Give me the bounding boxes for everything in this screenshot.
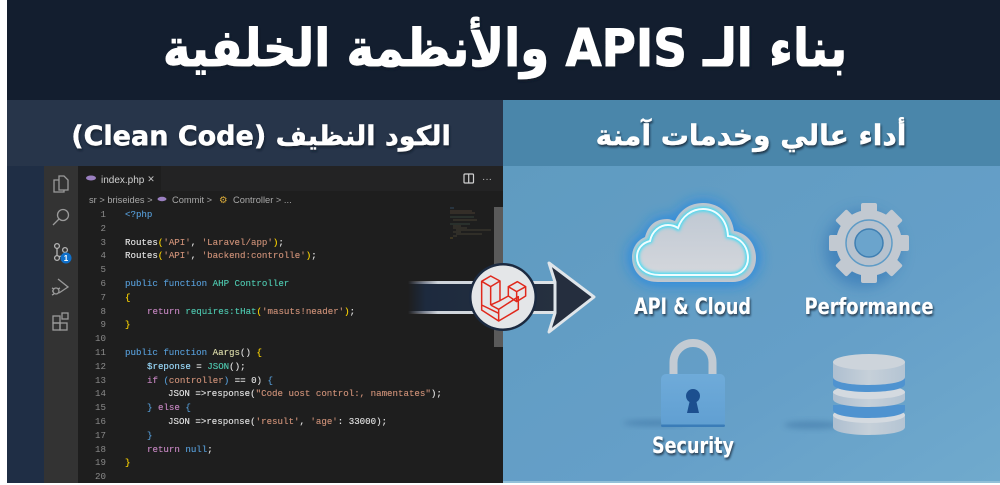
heading: performance: أداء عالي وخدمات آمنة (596, 117, 906, 152)
line numbers (95, 209, 107, 482)
line numbers: 2 (101, 223, 106, 234)
line numbers: 12 (95, 361, 106, 372)
line numbers: 16 (95, 416, 106, 427)
code listing: public function Aargs() { (125, 347, 262, 358)
code listing: Routes('API', 'Laravel/app'); (125, 237, 284, 248)
code listing (125, 209, 442, 468)
code listing: return null; (147, 444, 213, 455)
code listing: if (controller) == 0) { (147, 375, 273, 386)
tab: index.php: index.php (101, 175, 145, 186)
tab bar (78, 166, 503, 191)
label: Security: Security (652, 434, 734, 459)
line numbers: 14 (95, 388, 107, 399)
code listing: { (125, 292, 130, 303)
icon: laravel logo (482, 276, 526, 321)
line numbers: 7 (101, 292, 106, 303)
icon: files (54, 176, 68, 192)
code listing: Routes('API', 'backend:controlle'); (125, 250, 317, 261)
code listing: return requires:tHat('masuts!neader'); (147, 306, 355, 317)
tab: index.php (78, 166, 161, 191)
breadcrumbs: sr > briseides > (89, 195, 153, 205)
icon: laravel badge (469, 263, 537, 331)
title: بناء الـ APIS والأنظمة الخلفية (163, 16, 847, 80)
breadcrumbs: ⚙ (219, 195, 227, 205)
icon: source control (55, 244, 67, 260)
panel: performance header (503, 100, 1000, 166)
scrollbar (494, 207, 503, 347)
line numbers: 10 (95, 333, 106, 344)
line numbers: 4 (101, 250, 107, 261)
code listing: } (125, 319, 130, 330)
code listing: <?php (125, 209, 152, 220)
code listing: public function AHP Controller (125, 278, 289, 289)
line numbers: 20 (95, 471, 106, 482)
title band (7, 0, 1000, 100)
icon: database (784, 354, 905, 435)
icon: extensions (53, 313, 68, 330)
icon: cloud (629, 201, 759, 285)
breadcrumbs: Commit > (172, 195, 212, 205)
line numbers: 8 (101, 306, 106, 317)
code listing: JSON =>response('result', 'age': 33000); (168, 416, 387, 427)
breadcrumbs: Controller > ... (233, 195, 292, 205)
panel: services (503, 166, 1000, 483)
tab: index.php: ✕ (147, 174, 155, 184)
line numbers: 18 (95, 444, 106, 455)
icon: padlock (623, 343, 725, 427)
icon: gear (825, 203, 909, 287)
code listing: } (125, 457, 130, 468)
line numbers: 17 (95, 430, 106, 441)
label: API & Cloud: API & Cloud (634, 295, 751, 320)
icon: split editor (464, 174, 474, 183)
icon: more actions: ··· (482, 174, 492, 185)
code listing: } (147, 430, 152, 441)
line numbers: 3 (101, 237, 106, 248)
line numbers: 11 (95, 347, 107, 358)
line numbers: 9 (101, 319, 106, 330)
line numbers: 1 (101, 209, 107, 220)
icon: update badge: 1 (64, 254, 69, 263)
code listing: } else { (147, 402, 191, 413)
line numbers: 6 (101, 278, 106, 289)
label: Performance: Performance (804, 295, 934, 320)
activity bar (44, 166, 78, 483)
minimap (450, 208, 491, 238)
arrow: code to services (408, 263, 594, 332)
line numbers: 5 (101, 264, 106, 275)
line numbers: 19 (95, 457, 106, 468)
left panel background (7, 166, 44, 483)
code listing: JSON =>response("Code uost control:, namentates"); (168, 388, 442, 399)
heading: clean code: الكود النظيف (Clean Code) (71, 121, 451, 152)
breadcrumbs (89, 195, 292, 205)
icon: update badge (60, 252, 72, 264)
panel: code editor (44, 166, 503, 483)
line numbers: 15 (95, 402, 106, 413)
code listing: $reponse = JSON(); (147, 361, 246, 372)
panel: clean code header (7, 100, 503, 166)
icon: run and debug (52, 279, 68, 295)
icon: search (53, 210, 68, 225)
line numbers: 13 (95, 375, 106, 386)
